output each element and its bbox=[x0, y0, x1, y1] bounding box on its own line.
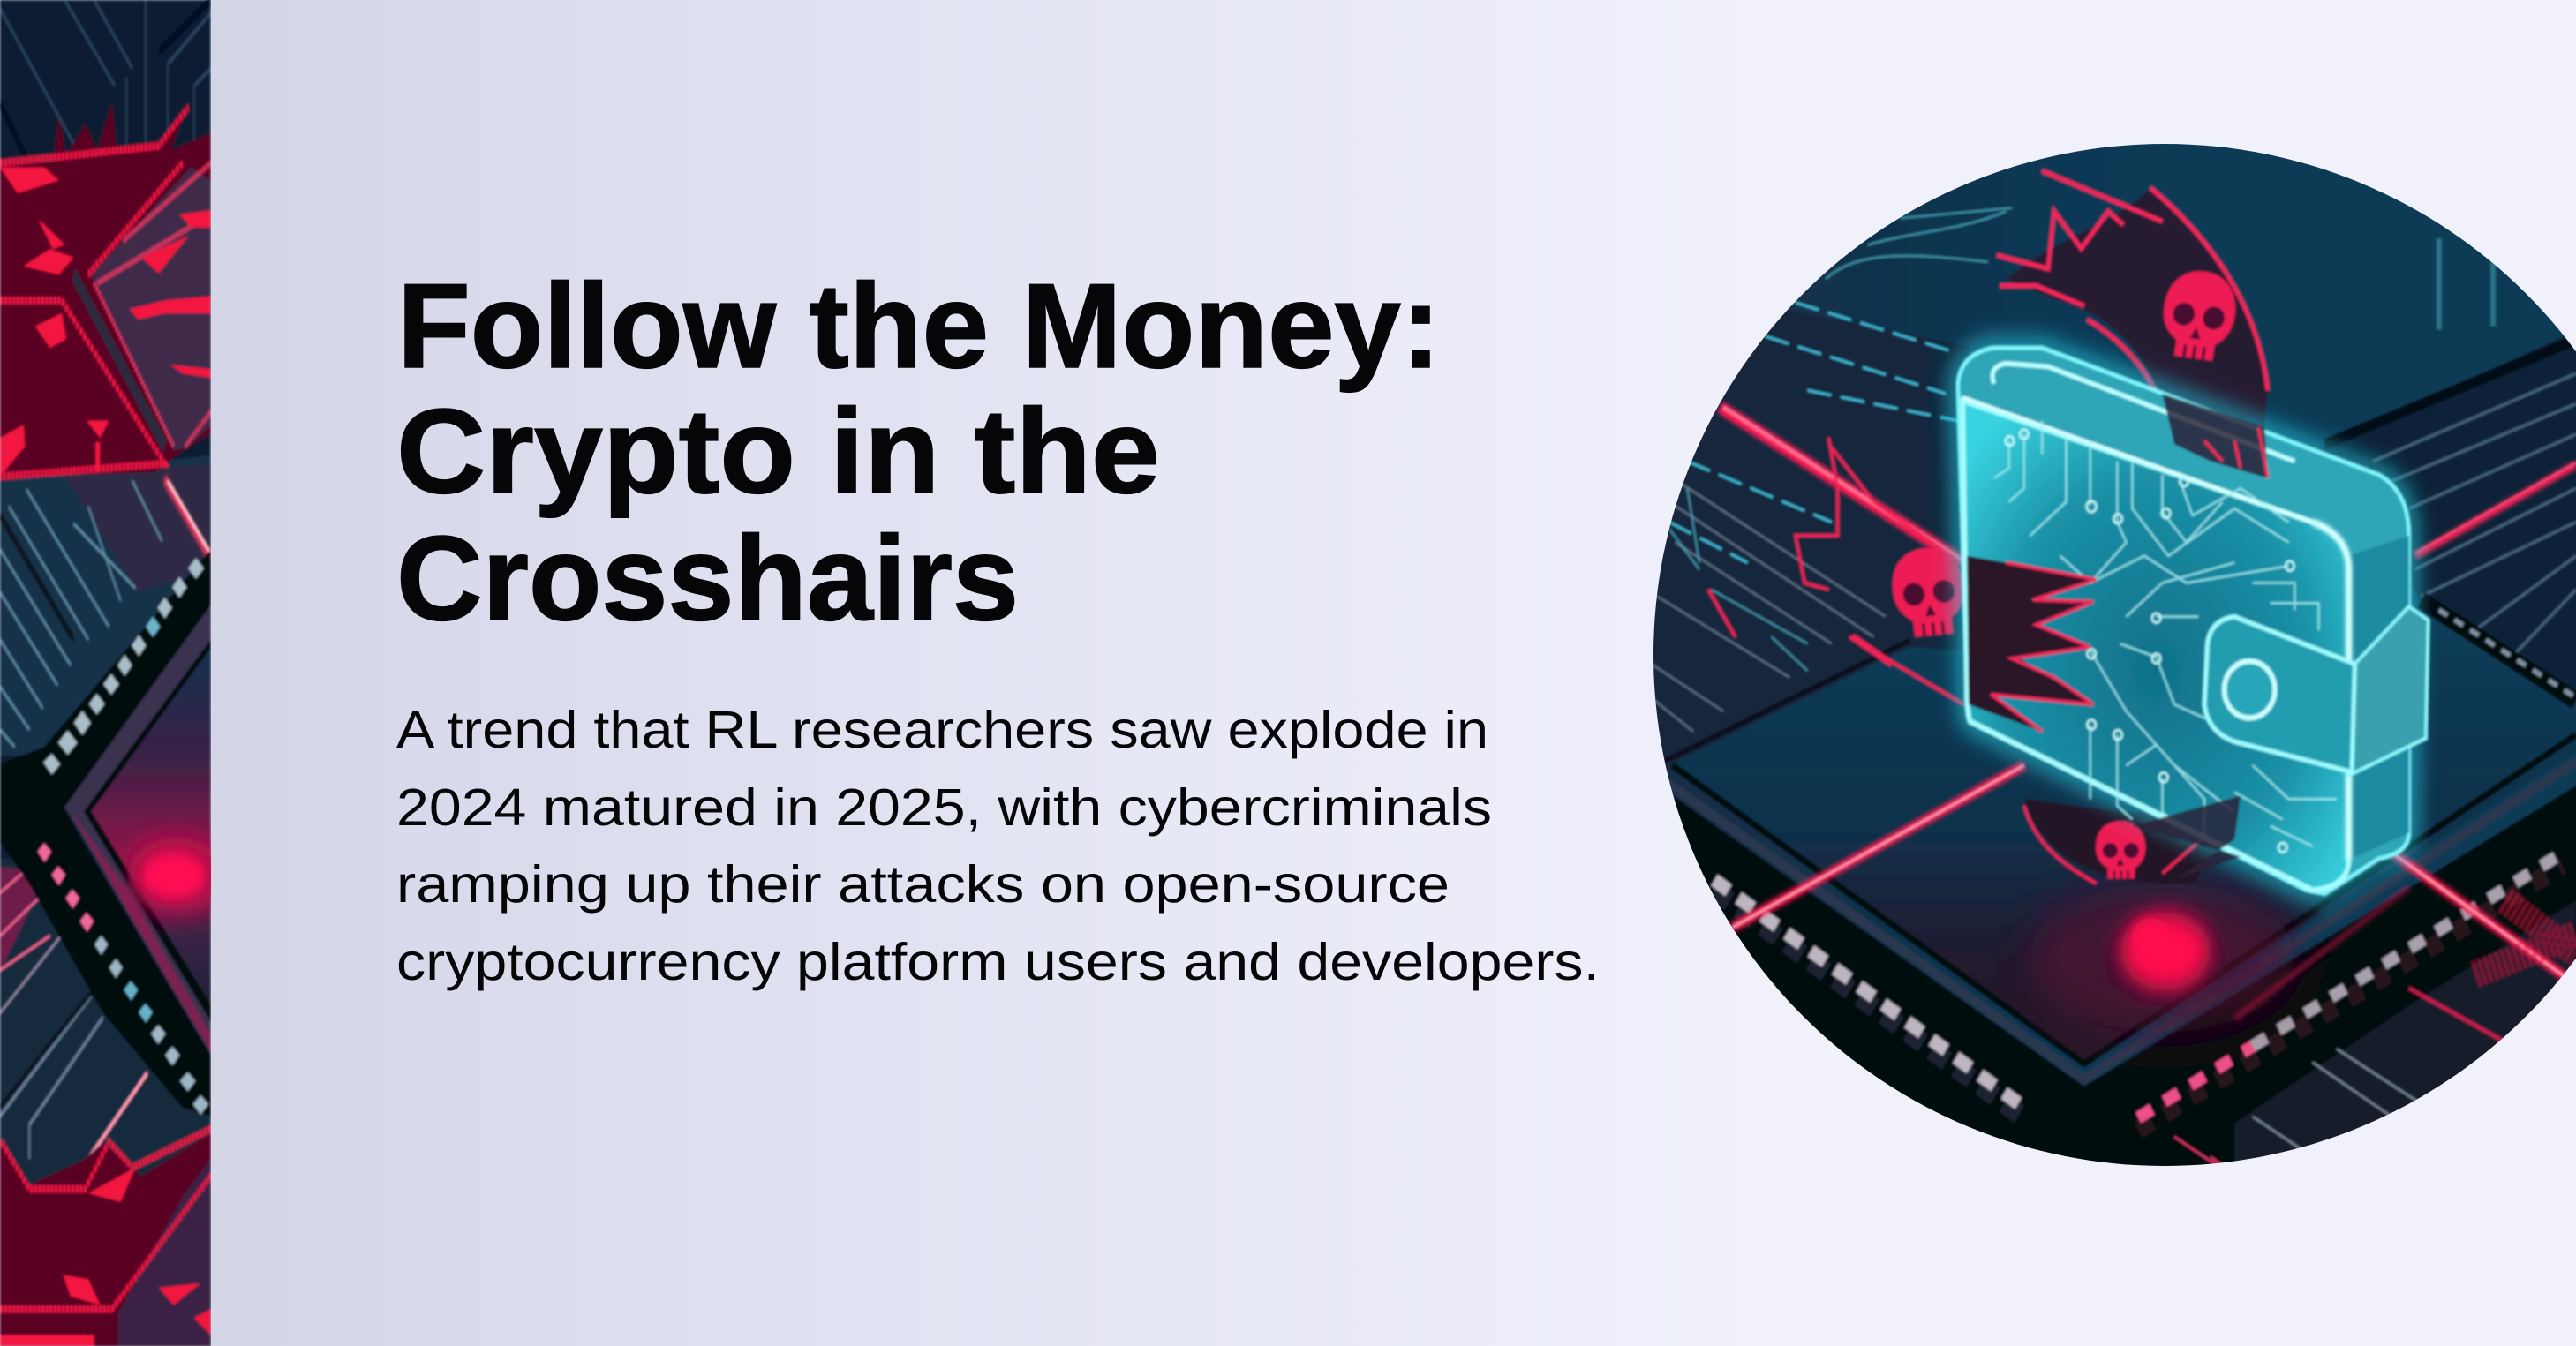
circuit traces bbox=[1994, 421, 2337, 846]
bottom pin bands bbox=[1674, 785, 2576, 1166]
wallet lower wisp overlap bbox=[2132, 795, 2241, 880]
title: Follow the Money: bbox=[397, 259, 1441, 393]
left torn wisps bbox=[1708, 438, 1964, 704]
red flame arc behind wallet bbox=[2006, 188, 2268, 475]
panel: circular crypto wallet illustration bbox=[1633, 124, 2576, 1204]
wallet top fold bbox=[1992, 364, 2294, 462]
upper trace band bbox=[0, 455, 211, 756]
chip surface bbox=[1669, 597, 2576, 1066]
red blotch: upper bbox=[0, 103, 211, 477]
title bbox=[396, 259, 1441, 645]
pins bbox=[1714, 891, 2027, 1120]
icon: glowing wallet bbox=[1958, 348, 2429, 893]
wallet glow bbox=[1958, 348, 2409, 893]
pin bands bbox=[0, 550, 211, 1117]
upper left dark trace area bbox=[1663, 311, 1970, 771]
bottom wisp bbox=[2024, 799, 2258, 884]
panel: left circuit board image strip bbox=[0, 0, 227, 1346]
wallet back panel bbox=[1958, 348, 2409, 893]
body text block: 2024 matured in 2025, with cybercriminals bbox=[396, 778, 1492, 837]
title: Crosshairs bbox=[396, 511, 1019, 645]
body text block: A trend that RL researchers saw explode in bbox=[396, 701, 1488, 759]
red laser lines bbox=[1721, 407, 2576, 1042]
torn dark edge bbox=[1967, 556, 2097, 732]
body text block: ramping up their attacks on open-source bbox=[396, 855, 1450, 914]
upper wisp over wallet bbox=[2162, 394, 2268, 478]
top navy traces bbox=[0, 0, 211, 159]
lower pins bbox=[38, 843, 94, 931]
lower traces bbox=[0, 856, 210, 1186]
wallet front panel bbox=[1962, 401, 2349, 891]
skull: left bbox=[1888, 545, 1969, 639]
wallet strap bbox=[2349, 606, 2429, 776]
red blotch: lower bbox=[0, 1133, 211, 1346]
skull: top bbox=[2158, 267, 2241, 363]
chip surface bbox=[64, 605, 211, 1054]
red chip glow bbox=[2030, 884, 2294, 1032]
wallet clasp bbox=[2225, 661, 2275, 718]
body text block: cryptocurrency platform users and developers. bbox=[396, 933, 1600, 991]
upper pins bbox=[43, 558, 204, 774]
skull: bottom bbox=[2096, 821, 2145, 878]
title: Crypto in the bbox=[396, 384, 1160, 518]
body text block bbox=[396, 701, 1600, 991]
upper right traces bbox=[2320, 335, 2576, 699]
